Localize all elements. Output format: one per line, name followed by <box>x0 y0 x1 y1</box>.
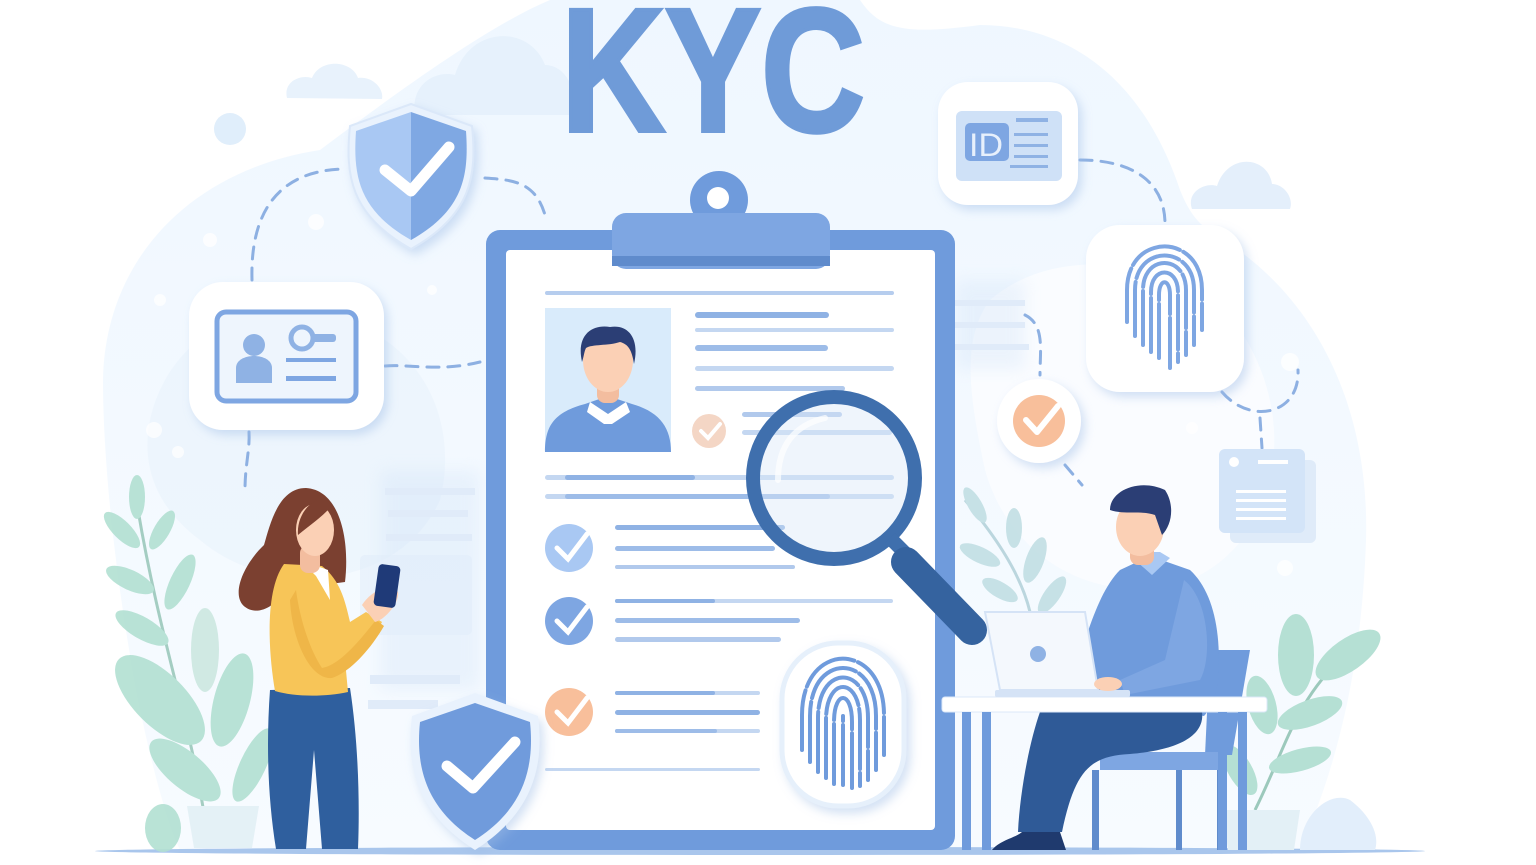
clipboard <box>486 171 955 850</box>
profile text lines <box>695 312 894 435</box>
shield top <box>349 104 473 249</box>
floor line <box>95 847 1425 855</box>
small document card <box>1219 449 1316 543</box>
checklist item 3 <box>545 688 760 771</box>
orange check badge <box>997 379 1081 463</box>
shield bottom <box>410 693 540 850</box>
woman with phone <box>239 488 401 849</box>
fingerprint badge <box>782 643 904 806</box>
middle text lines <box>545 475 894 499</box>
profile photo <box>545 308 671 452</box>
checklist item 1 <box>545 524 795 572</box>
desk <box>942 697 1267 850</box>
card: ID document <box>938 82 1078 205</box>
card: ID document: ID <box>969 127 1003 163</box>
chair <box>1092 650 1250 850</box>
man at desk <box>942 485 1267 850</box>
dashed connectors <box>245 160 1298 490</box>
small orange check <box>692 414 726 448</box>
torso <box>1085 556 1219 716</box>
laptop <box>985 612 1130 697</box>
head <box>1130 535 1154 565</box>
plant right <box>1216 614 1388 850</box>
plant left <box>99 475 282 852</box>
legs <box>1018 712 1202 832</box>
plant behind man <box>957 484 1071 618</box>
card: fingerprint <box>1086 225 1244 392</box>
magnifying glass <box>753 397 972 630</box>
checklist item 2 <box>545 597 893 645</box>
document header rule <box>545 291 894 295</box>
card: ID with key <box>189 282 384 430</box>
clipboard clip <box>612 171 830 269</box>
